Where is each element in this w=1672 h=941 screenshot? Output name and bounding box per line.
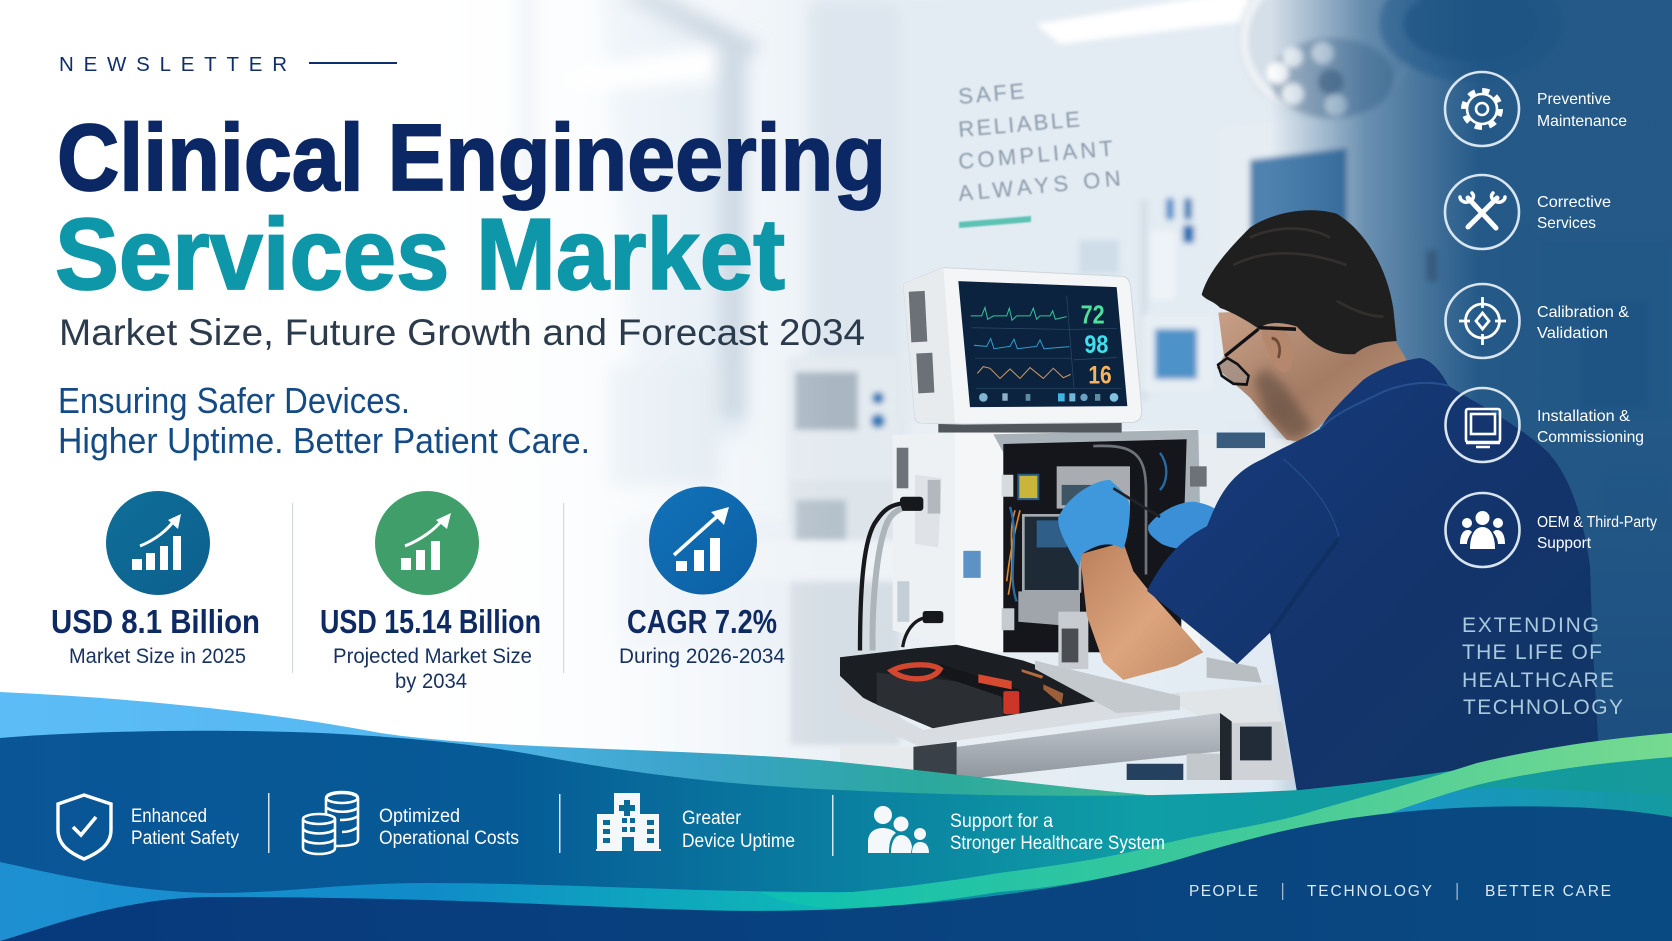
service label: oem and third-party support [1537, 514, 1657, 552]
benefit: enhanced patient safety [58, 795, 239, 859]
tagline: extending the life of healthcare technology: EXTENDING [1462, 614, 1599, 637]
service: preventive maintenance [1445, 72, 1519, 146]
benefit: enhanced patient safety: Patient Safety [131, 828, 239, 849]
hair [1202, 210, 1397, 354]
patient monitor [903, 268, 1142, 433]
ring [1446, 284, 1520, 358]
divider [832, 795, 834, 856]
tagline: safer devices: Higher Uptime. Better Patient Care. [58, 420, 590, 461]
service label: corrective services: Corrective [1537, 194, 1611, 211]
stat: projected market size 2034: Projected Market Size [333, 644, 532, 668]
service label: oem and third-party support: Support [1537, 535, 1592, 552]
stat: projected market size 2034 [320, 491, 541, 693]
divider [559, 794, 560, 853]
benefit: support for a stronger healthcare system: Stronger Healthcare System [950, 833, 1165, 854]
tagline: extending the life of healthcare technology: TECHNOLOGY [1463, 696, 1623, 719]
stat: cagr: CAGR 7.2% [627, 603, 777, 640]
benefit: greater device uptime: Greater [682, 808, 742, 829]
footer strapline: PEOPLE [1189, 883, 1258, 900]
service: oem and third-party support [1446, 493, 1520, 567]
stat: cagr: During 2026-2034 [619, 644, 785, 668]
monitor screen: 16 [1088, 362, 1112, 390]
service unit body [860, 429, 1293, 669]
service label: installation and commissioning: Installation & [1537, 408, 1630, 425]
stat: projected market size 2034: by 2034 [395, 669, 467, 693]
monitor screen: 98 [1084, 332, 1108, 359]
stat: market size 2025: USD 8.1 Billion [51, 603, 260, 640]
hair highlights [1233, 229, 1383, 317]
service label: oem and third-party support: OEM & Third-Party [1537, 514, 1657, 531]
newsletter label: NEWSLETTER [59, 53, 287, 76]
benefit: optimized operational costs: Operational Costs [379, 828, 519, 849]
service label: corrective services: Services [1537, 215, 1596, 232]
stat: market size 2025: Market Size in 2025 [69, 644, 246, 668]
title: Services Market [55, 199, 785, 311]
screwdriver [1113, 488, 1160, 517]
forearm [1080, 542, 1203, 680]
benefit: support for a stronger healthcare system: Support for a [950, 811, 1053, 832]
medical equipment: patient monitor, open service unit and tool cart [840, 268, 1293, 780]
service label: preventive maintenance [1537, 91, 1627, 130]
tagline: extending the life of healthcare technology: THE LIFE OF [1462, 641, 1602, 664]
monitor screen: 72 [1081, 300, 1105, 330]
wall lettering: safe reliable compliant always on: COMPLIANT [957, 136, 1114, 174]
target icon [1459, 297, 1506, 345]
ring [1446, 493, 1520, 567]
icon: hospital [596, 793, 661, 851]
face and neck [1217, 309, 1407, 441]
subtitle: Market Size, Future Growth and Forecast 2034 [59, 312, 865, 353]
cart table behind [1180, 657, 1293, 780]
wall lettering: safe reliable compliant always on: SAFE [957, 78, 1025, 109]
footer strapline [1189, 883, 1611, 900]
icon: family group [868, 806, 929, 853]
shirt [1147, 358, 1598, 810]
tagline: extending the life of healthcare technology [1462, 614, 1623, 719]
ring [1445, 72, 1519, 146]
icon: growth chart [106, 491, 210, 595]
wall lettering: safe reliable compliant always on: RELIABLE [957, 106, 1081, 142]
service label: preventive maintenance: Preventive [1537, 91, 1611, 108]
icon: growth chart [649, 486, 757, 594]
benefit: enhanced patient safety: Enhanced [131, 806, 207, 827]
stat: cagr [619, 486, 785, 668]
tagline: safer devices: Ensuring Safer Devices. [58, 380, 410, 421]
service label: calibration and validation: Calibration & [1537, 304, 1629, 321]
service label: installation and commissioning [1537, 408, 1644, 446]
tagline: extending the life of healthcare technology: HEALTHCARE [1462, 669, 1614, 692]
icon: growth chart [375, 491, 479, 595]
benefit: optimized operational costs: Optimized [379, 806, 460, 827]
tagline: safer devices [58, 380, 590, 461]
glasses [1218, 328, 1296, 385]
right hand glove [1148, 502, 1218, 549]
service label: corrective services [1537, 194, 1611, 232]
service: calibration and validation [1446, 284, 1520, 358]
icon: coin stacks [303, 792, 358, 854]
service label: preventive maintenance: Maintenance [1537, 113, 1627, 130]
title [55, 105, 886, 311]
ring [1446, 388, 1520, 462]
ear [1262, 326, 1293, 373]
service label: installation and commissioning: Commissioning [1537, 429, 1644, 446]
technician [1147, 210, 1598, 810]
footer strapline: TECHNOLOGY [1307, 883, 1432, 900]
footer strapline: BETTER CARE [1485, 883, 1611, 900]
stat: market size 2025 [51, 491, 260, 668]
beard shadow [1253, 368, 1313, 439]
service: corrective services [1445, 175, 1519, 249]
wall lettering: safe reliable compliant always on [957, 78, 1122, 228]
benefit: optimized operational costs [303, 792, 519, 854]
benefit: greater device uptime [596, 793, 795, 852]
ring [1445, 175, 1519, 249]
tool case [840, 645, 1097, 733]
wrench and screwdriver icon [1460, 193, 1505, 228]
title: Clinical Engineering [57, 105, 886, 211]
shirt folds [1270, 383, 1448, 633]
screen icon [1466, 409, 1500, 447]
stat: projected market size 2034: USD 15.14 Billion [320, 603, 541, 640]
people icon [1460, 511, 1505, 549]
benefit: support for a stronger healthcare system [868, 806, 1165, 854]
arm and gloved hands [1058, 480, 1218, 680]
service label: calibration and validation [1537, 304, 1629, 342]
icon: shield [58, 795, 111, 859]
divider [268, 793, 270, 853]
cart rail [840, 661, 1232, 780]
footer waves [0, 692, 1672, 941]
left hand glove [1058, 480, 1130, 568]
service label: calibration and validation: Validation [1537, 325, 1608, 342]
divider [292, 503, 293, 673]
monitor screen [958, 281, 1127, 407]
wall lettering: safe reliable compliant always on: ALWAYS ON [957, 165, 1122, 206]
benefit: greater device uptime: Device Uptime [682, 831, 795, 852]
service: installation and commissioning [1446, 388, 1520, 462]
divider [563, 503, 564, 673]
gear icon [1464, 91, 1500, 127]
